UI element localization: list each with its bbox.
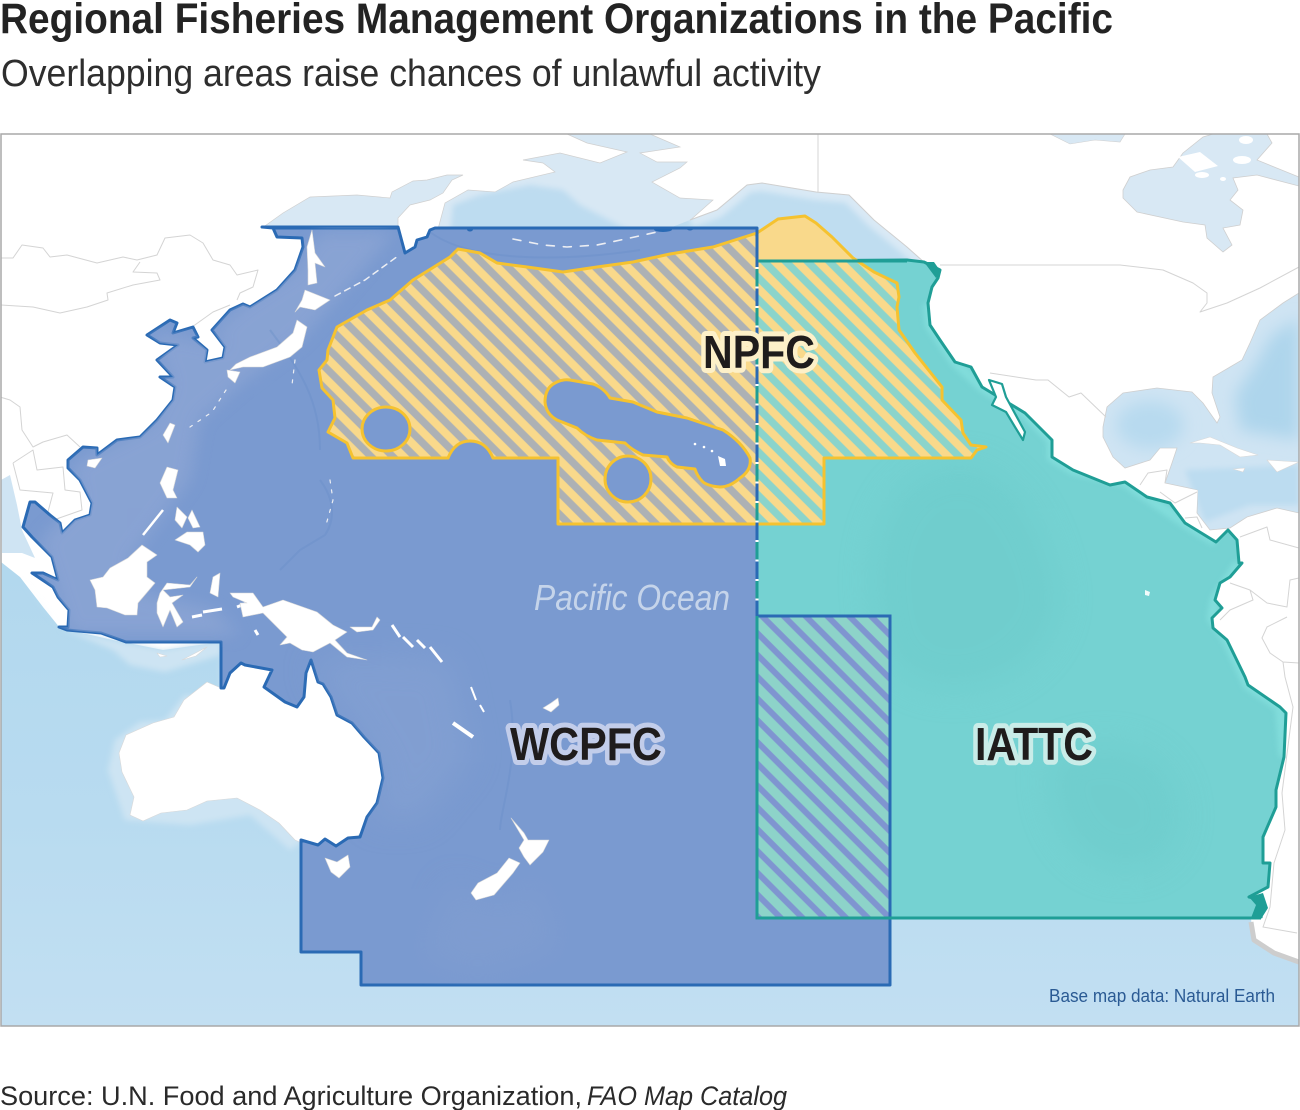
Luzon xyxy=(160,467,178,498)
Borneo xyxy=(90,545,157,615)
Lesser Sunda Islands xyxy=(192,603,258,635)
label: WCPFC: WCPFC xyxy=(510,718,662,770)
New Guinea xyxy=(230,593,367,660)
islands in the western Pacific xyxy=(87,230,657,900)
Galapagos xyxy=(1145,590,1150,596)
Kuril and Aleutian chains xyxy=(335,256,398,296)
overlap of WCPFC and IATTC xyxy=(757,616,1261,985)
label: Pacific Ocean: Pacific Ocean xyxy=(534,577,730,618)
New Zealand North Island xyxy=(511,818,549,865)
Southern Chile coastal blob xyxy=(1249,893,1268,919)
Sakhalin xyxy=(307,230,325,285)
Ryukyu and Izu chains xyxy=(190,360,333,525)
label: NPFC: NPFC xyxy=(703,326,815,378)
Timor Sea shelf and pale rim around Australia xyxy=(73,632,300,849)
Palawan xyxy=(143,510,163,535)
Caribbean islands xyxy=(1190,437,1299,472)
label: IATTC: IATTC xyxy=(975,718,1093,770)
Fiji xyxy=(543,698,559,712)
Visayas xyxy=(175,507,200,528)
Baja California xyxy=(989,380,1025,440)
base map credit: Base map data: Natural Earth xyxy=(1049,986,1275,1006)
Australia landmass xyxy=(118,665,382,844)
southern and Indian ocean water xyxy=(1,562,1299,1026)
Bering Sea deep water xyxy=(450,184,624,226)
Sea of Okhotsk xyxy=(262,175,463,228)
IATTC area xyxy=(757,260,1286,918)
WCPFC ocean shading xyxy=(40,229,757,975)
Halmahera xyxy=(210,573,220,597)
Patagonia fjords xyxy=(1251,922,1299,962)
Solomon Islands xyxy=(392,625,442,662)
Mindanao xyxy=(175,532,205,552)
Kyushu xyxy=(227,370,240,383)
Hokkaido xyxy=(295,290,330,312)
Hainan xyxy=(87,458,102,468)
Vancouver Island xyxy=(926,262,938,278)
New Britain xyxy=(350,617,380,632)
Hudson Bay islands xyxy=(1178,136,1253,181)
Atlantic Ocean, Gulf of Mexico and Caribbean xyxy=(1103,293,1299,530)
source note xyxy=(0,1081,787,1110)
Honshu xyxy=(230,320,307,370)
Timor xyxy=(157,647,207,660)
New Caledonia xyxy=(453,723,473,737)
Arctic inlets xyxy=(1050,134,1125,144)
Hudson Bay xyxy=(1123,134,1299,252)
Sulawesi xyxy=(157,577,197,627)
Tasmania xyxy=(325,855,350,878)
Aleutian coastal blobs xyxy=(467,230,693,232)
Bay of Bengal xyxy=(1,475,35,558)
Bering Sea xyxy=(438,134,713,229)
land borders xyxy=(0,134,1299,933)
WCPFC area xyxy=(23,227,890,985)
Vanuatu xyxy=(471,687,484,712)
Taiwan xyxy=(163,423,175,443)
Gulf of Alaska xyxy=(667,183,925,263)
subtitle: Overlapping areas raise chances of unlawful activity xyxy=(1,53,821,95)
shared boundary line xyxy=(757,228,907,616)
Hawaii xyxy=(694,443,726,466)
New Zealand South Island xyxy=(471,858,520,900)
NPFC area, yellow over open water xyxy=(319,216,986,524)
